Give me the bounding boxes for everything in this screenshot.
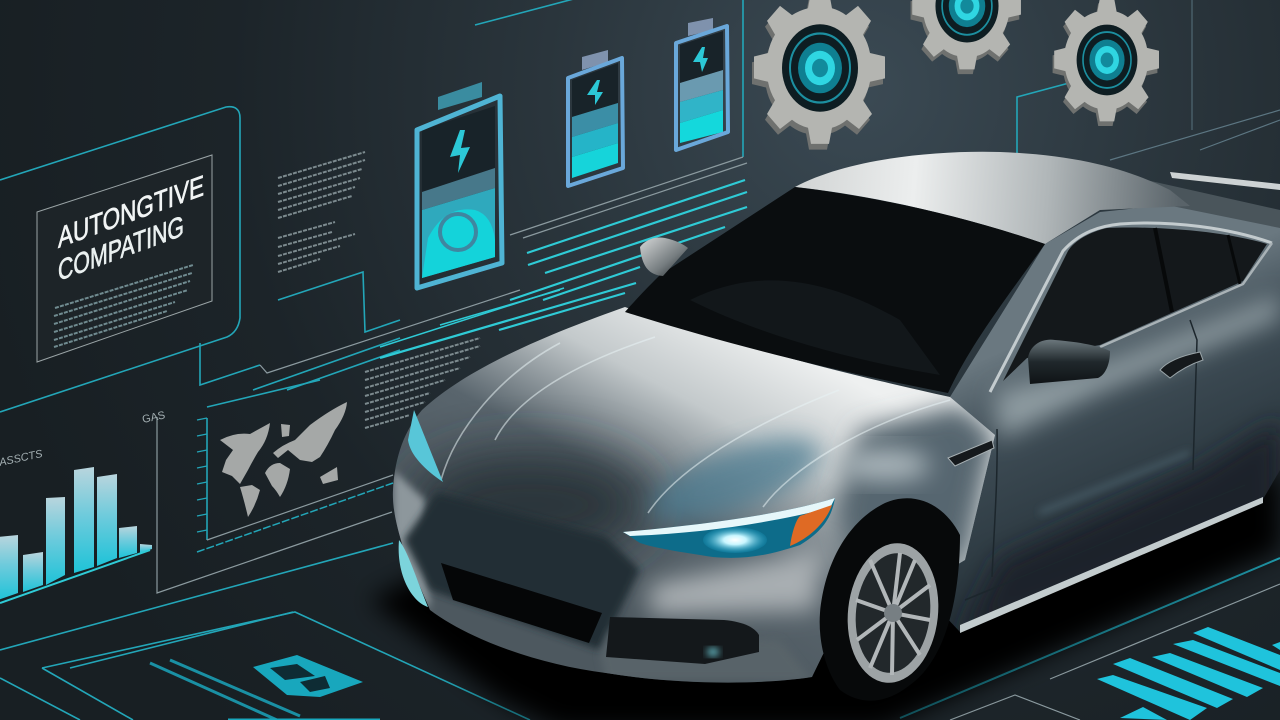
side sill highlight bbox=[960, 497, 1263, 633]
title panel bbox=[37, 155, 212, 362]
panel small text bbox=[54, 265, 193, 347]
medium battery icon bbox=[568, 50, 623, 186]
text block: near map bbox=[365, 338, 480, 428]
roof bbox=[795, 152, 1190, 244]
door lines bbox=[965, 320, 1245, 600]
car shadow bbox=[370, 470, 1280, 720]
floor panel bbox=[150, 655, 380, 720]
gear icons bbox=[752, 0, 1159, 150]
teal data lines bbox=[380, 180, 747, 358]
small battery icon bbox=[676, 18, 728, 150]
windshield interior bbox=[690, 280, 940, 375]
headlight upper strip bbox=[623, 498, 835, 536]
side mirror left bbox=[640, 237, 688, 276]
bar chart bbox=[0, 409, 166, 603]
car bbox=[370, 152, 1280, 720]
hood and front body bbox=[380, 290, 1000, 690]
belt chrome bbox=[1100, 243, 1272, 347]
grille bbox=[441, 563, 602, 643]
lower intake bbox=[606, 617, 759, 664]
hood crease highlights bbox=[441, 337, 950, 513]
front wheel bbox=[820, 498, 960, 701]
rear deck bbox=[1133, 177, 1280, 228]
rear deck highlight bbox=[1170, 172, 1280, 190]
side mirror right bbox=[1028, 340, 1110, 384]
window pillar bbox=[1155, 228, 1172, 312]
window frame bbox=[990, 223, 1272, 392]
door handle bbox=[1160, 352, 1203, 378]
fog light bbox=[399, 540, 428, 607]
title text: AUTONGTIVE bbox=[58, 170, 204, 255]
rear window pillar bbox=[1228, 235, 1240, 284]
side windows bbox=[1003, 228, 1267, 381]
headlight left bbox=[408, 410, 443, 482]
headlight orange bbox=[790, 505, 832, 546]
car body side bbox=[950, 206, 1280, 632]
fog lamp bbox=[707, 648, 719, 656]
bar chart: GAS bbox=[141, 409, 166, 426]
world map panel bbox=[197, 402, 393, 552]
fender vent bbox=[948, 440, 994, 466]
text block: middle column bbox=[278, 152, 365, 272]
subtitle text: COMPATING bbox=[58, 210, 184, 288]
large battery icon bbox=[417, 82, 502, 288]
headlight right bbox=[623, 498, 835, 558]
bottom right bars bbox=[1097, 627, 1280, 720]
windshield bbox=[625, 187, 1045, 393]
headlight glow bbox=[703, 527, 767, 553]
